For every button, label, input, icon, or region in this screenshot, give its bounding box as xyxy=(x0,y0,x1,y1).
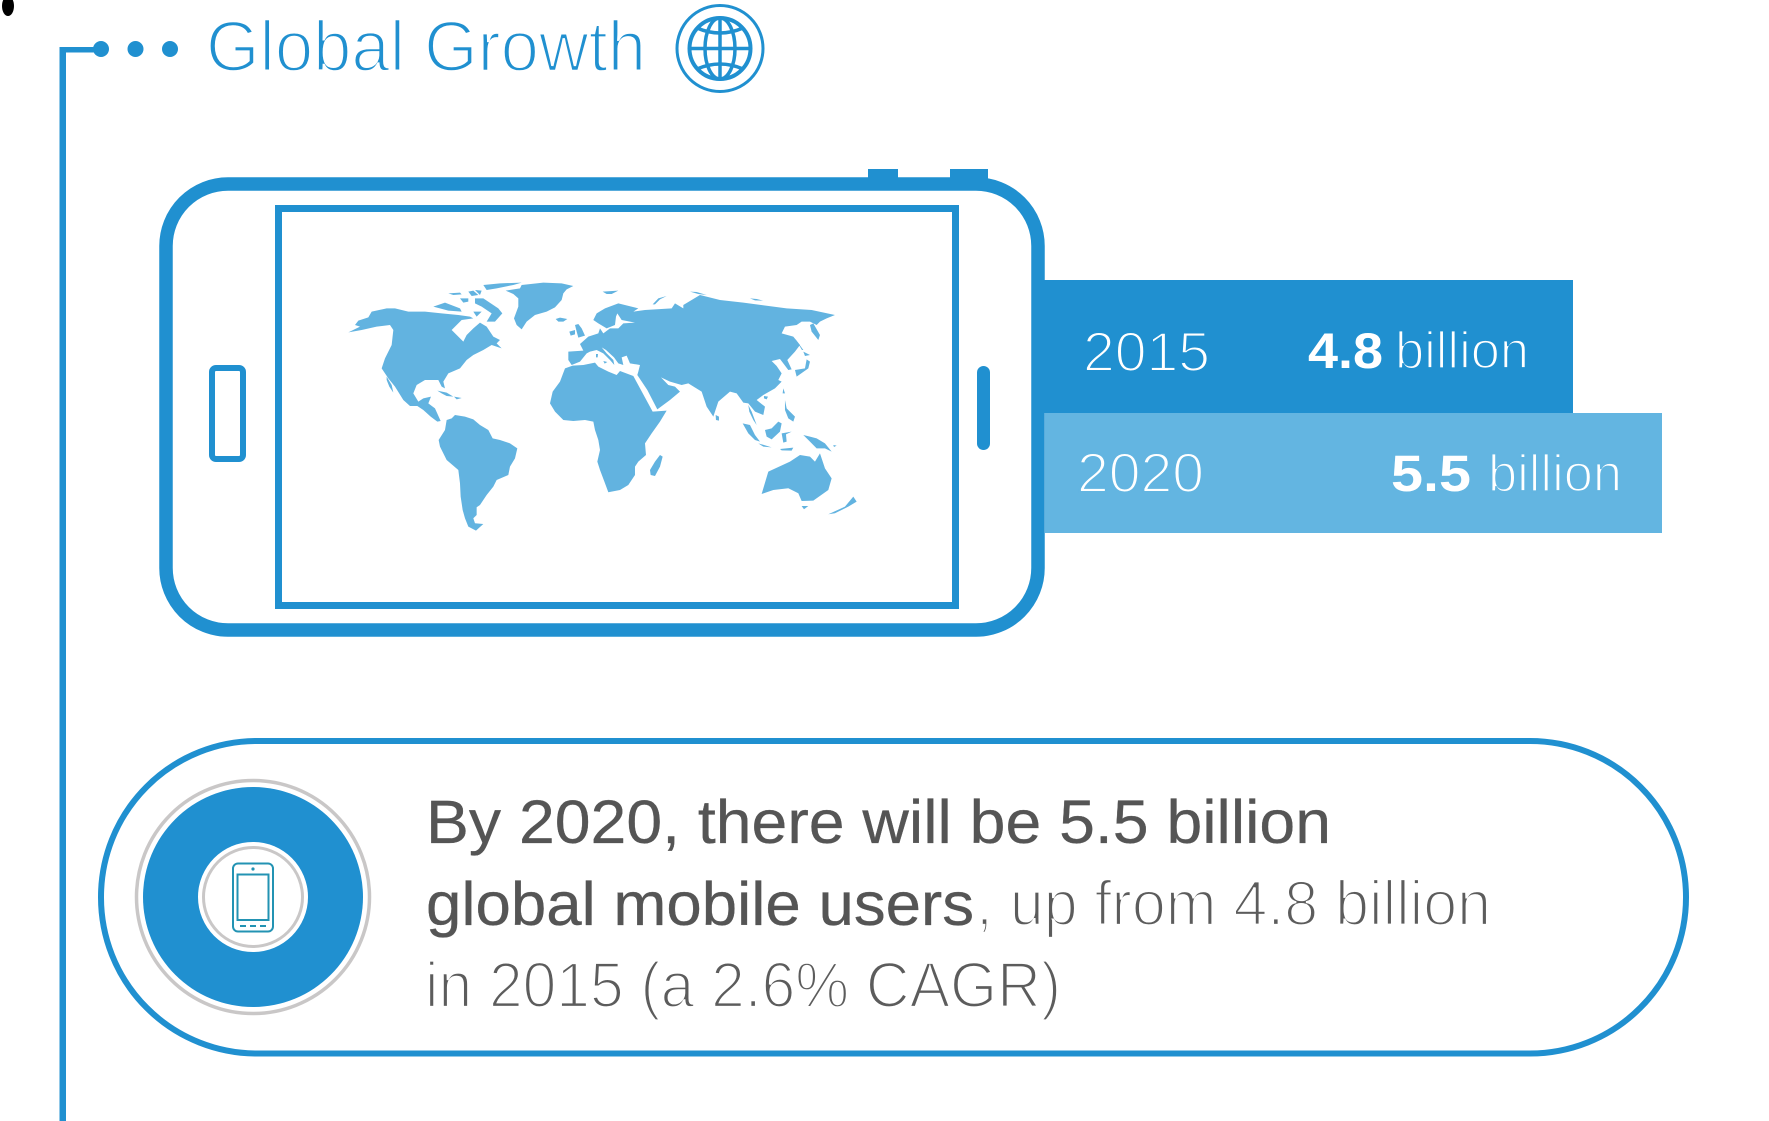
side buttons xyxy=(868,169,988,179)
stat bar: 2015: billion xyxy=(1395,322,1529,380)
stat bar: 2020: billion xyxy=(1488,445,1622,503)
callout text: By 2020, there will be 5.5 billion xyxy=(426,788,1331,856)
stat bar: 2015: 4.8 xyxy=(1308,323,1383,379)
callout text: global mobile users xyxy=(426,870,974,938)
stat bar: 2015 xyxy=(1040,280,1573,413)
stat bar: 2020 xyxy=(1045,413,1662,533)
home button xyxy=(212,368,243,459)
connector line with dots xyxy=(60,41,178,1121)
icon: globe xyxy=(677,6,763,92)
phone screen xyxy=(278,208,956,606)
phone illustration xyxy=(166,169,1038,630)
callout text: in 2015 (a 2.6% CAGR) xyxy=(425,949,1061,1021)
callout pill xyxy=(101,741,1686,1054)
speaker xyxy=(977,366,990,450)
title: Global Growth xyxy=(206,8,646,87)
callout text xyxy=(425,788,1491,1021)
callout text: , up from 4.8 billion xyxy=(976,869,1491,939)
world map xyxy=(348,283,857,531)
phone body xyxy=(166,184,1038,630)
stat bar: 2020: 5.5 xyxy=(1391,445,1471,502)
stat bar: 2015: 2015 xyxy=(1083,320,1210,383)
stat bar: 2020: 2020 xyxy=(1077,441,1204,504)
icon: mobile phone badge xyxy=(136,780,370,1014)
stray black mark xyxy=(2,0,14,16)
